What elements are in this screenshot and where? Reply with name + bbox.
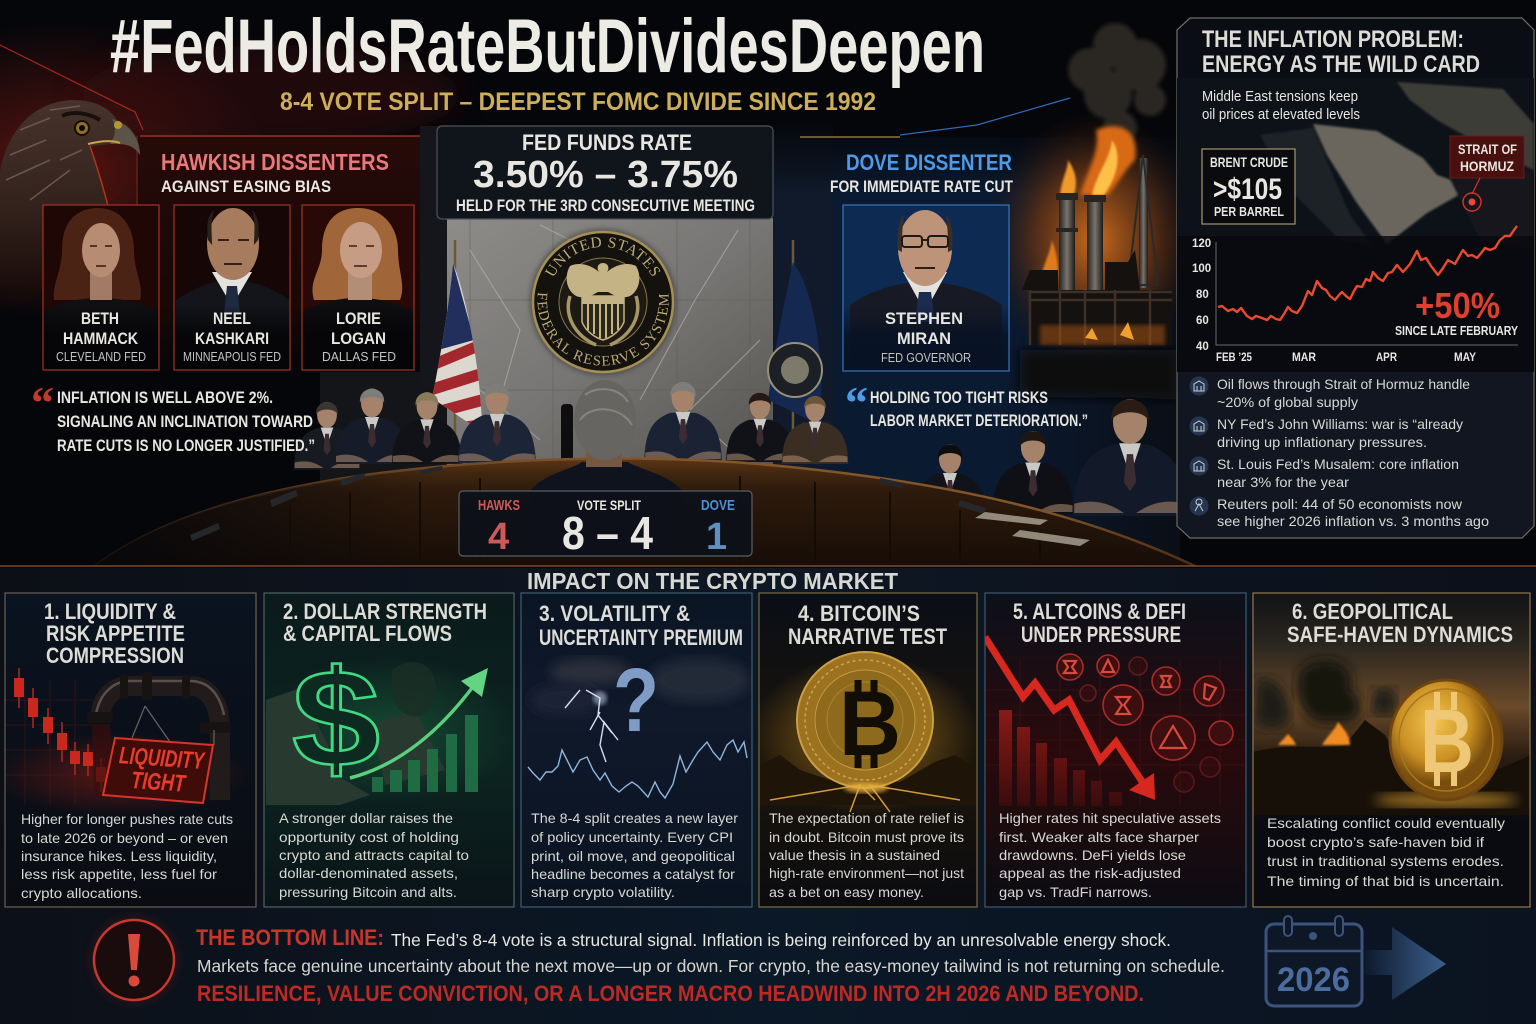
quote: hawkish dissenters: “	[31, 377, 54, 428]
quote: hawkish dissenters: SIGNALING AN INCLINATION TOWARD	[57, 413, 313, 431]
card 1: liquidity: RISK APPETITE	[46, 621, 185, 646]
quote: hawkish dissenters	[31, 377, 315, 455]
illustration: liquidity tight pipe and candles	[6, 668, 237, 812]
portrait card: Lorie Logan: DALLAS FED	[322, 349, 396, 364]
card 1: liquidity: COMPRESSION	[46, 643, 184, 668]
card 1: liquidity: Higher for longer pushes rate cuts	[21, 811, 233, 827]
portrait card: Beth Hammack	[43, 205, 159, 370]
card 5: altcoins and defi: Higher rates hit speculative assets	[999, 810, 1221, 826]
chart: brent crude price: APR	[1376, 352, 1398, 364]
background: right navy side	[775, 137, 1180, 567]
heading: impact on the crypto market: IMPACT ON THE CRYPTO MARKET	[527, 568, 898, 594]
callout: strait of hormuz: HORMUZ	[1460, 159, 1514, 174]
title: #FedHoldsRateButDividesDeepen	[110, 4, 985, 89]
card 4: bitcoin narrative: The expectation of rate relief is	[769, 810, 964, 826]
heading: hawkish dissenters	[161, 149, 389, 196]
quote: hawkish dissenters: INFLATION IS WELL ABOVE 2%.	[57, 389, 273, 407]
illustration: liquidity tight pipe and candles: TIGHT	[130, 767, 188, 798]
illustration: liquidity tight pipe and candles: LIQUIDITY	[118, 742, 206, 775]
callout: brent crude: BRENT CRUDE	[1210, 154, 1288, 170]
list: inflation facts	[1178, 372, 1533, 537]
chair at the centre of the table	[561, 404, 573, 464]
quote: dove dissenter	[845, 377, 1088, 430]
panel: fed funds rate: FED FUNDS RATE	[522, 130, 692, 155]
text: bottom line: Markets face genuine uncertainty about the next move—up or down. For crypto, the easy-money tailwind is not returning on schedule.	[197, 956, 1225, 976]
portrait card: Beth Hammack: HAMMACK	[63, 329, 139, 348]
sub text: Middle East tensions keep	[1202, 89, 1358, 105]
portrait card: Stephen Miran: MIRAN	[897, 329, 951, 348]
quote: dove dissenter: HOLDING TOO TIGHT RISKS	[870, 389, 1048, 407]
portrait card: Stephen Miran: STEPHEN	[885, 309, 963, 328]
illustration: storm, question mark, volatile line: ?	[613, 651, 659, 751]
card 4: bitcoin narrative: in doubt. Bitcoin must prove its	[769, 829, 964, 845]
card 3: volatility: 3. VOLATILITY &	[539, 601, 690, 626]
list: inflation facts: St. Louis Fed’s Musalem: core inflation	[1217, 456, 1459, 472]
quote: hawkish dissenters: RATE CUTS IS NO LONGER JUSTIFIED.”	[57, 437, 315, 455]
text: bottom line: The Fed’s 8-4 vote is a structural signal. Inflation is being reinforced by an unresolvable energy shock.	[391, 930, 1171, 950]
card 6: geopolitical safe haven: boost crypto’s safe-haven bid if	[1267, 834, 1484, 850]
chart: brent crude price: 40	[1196, 341, 1209, 353]
icon: hawk head	[0, 100, 140, 315]
card 1: liquidity	[0, 593, 256, 907]
card 2: dollar strength: A stronger dollar raises the	[279, 810, 453, 826]
portrait card: Neel Kashkari: NEEL	[213, 309, 251, 328]
panel: vote split: DOVE	[701, 497, 735, 514]
chart: brent crude price: FEB ’25	[1216, 352, 1253, 364]
heading: hawkish dissenters: AGAINST EASING BIAS	[161, 177, 331, 196]
card 5: altcoins and defi: drawdowns. DeFi yields lose	[999, 847, 1186, 863]
decorative accent lines	[800, 136, 900, 138]
heading: THE INFLATION PROBLEM:	[1202, 26, 1464, 53]
panel: fed funds rate: HELD FOR THE 3RD CONSECUTIVE MEETING	[456, 196, 755, 215]
card 3: volatility: The 8-4 split creates a new layer	[531, 810, 738, 826]
oil refinery on fire	[987, 23, 1203, 400]
card 3: volatility: UNCERTAINTY PREMIUM	[539, 625, 743, 650]
card 1: liquidity: 1. LIQUIDITY &	[44, 599, 176, 624]
panel: vote split	[459, 491, 752, 559]
list: inflation facts: ~20% of global supply	[1217, 394, 1358, 410]
Federal Reserve seal	[528, 226, 678, 377]
panel: vote split: 4	[488, 516, 509, 558]
portrait card: Neel Kashkari: MINNEAPOLIS FED	[183, 349, 281, 364]
illustration: neon dollar, bills, rising arrow	[266, 662, 492, 805]
illustration: bitcoin coin on cracked ground	[750, 652, 980, 815]
subtitle: 8-4 VOTE SPLIT – DEEPEST FOMC DIVIDE SINCE 1992	[280, 88, 876, 116]
panel: vote split: HAWKS	[478, 497, 520, 514]
card 4: bitcoin narrative: 4. BITCOIN’S	[798, 601, 920, 626]
illustration: neon dollar, bills, rising arrow: $	[292, 642, 380, 796]
flag: United States	[432, 240, 482, 435]
quote: dove dissenter: “	[845, 377, 868, 428]
list: inflation facts: see higher 2026 inflation vs. 3 months ago	[1217, 513, 1489, 529]
illustration: falling arrow, bars, tokens	[985, 637, 1246, 806]
Federal Reserve seal: FEDERAL RESERVE SYSTEM	[537, 292, 669, 366]
card 4: bitcoin narrative: value thesis in a sustained	[769, 847, 940, 863]
chart: brent crude price: 100	[1192, 263, 1211, 275]
callout: brent crude: >$105	[1213, 173, 1282, 206]
list: inflation facts: Oil flows through Strait of Hormuz handle	[1217, 376, 1470, 392]
panel: the inflation problem: oil prices at elevated levels	[1202, 107, 1360, 123]
card 3: volatility	[521, 593, 752, 907]
list: inflation facts: Reuters poll: 44 of 50 economists now	[1217, 496, 1463, 512]
chart: brent crude price: 120	[1192, 238, 1211, 250]
card 6: geopolitical safe haven: The timing of that bid is uncertain.	[1267, 873, 1504, 889]
card 3: volatility: sharp crypto volatility.	[531, 884, 675, 900]
card 4: bitcoin narrative: high-rate environment—not just	[769, 865, 964, 881]
chart: brent crude price	[1192, 226, 1519, 364]
portrait card: Lorie Logan: LORIE	[336, 309, 381, 328]
foreground figure (back of head)	[530, 380, 683, 556]
portrait card: Neel Kashkari	[174, 205, 290, 370]
portrait card: Stephen Miran: FED GOVERNOR	[881, 350, 971, 365]
text: bottom line: THE BOTTOM LINE:	[196, 925, 384, 950]
callout: brent crude	[1202, 149, 1295, 224]
heading: dove dissenter	[830, 150, 1013, 196]
callout: strait of hormuz	[1450, 136, 1524, 211]
illustration: burning landscape and gold bitcoin	[1253, 660, 1530, 815]
card 6: geopolitical safe haven: Escalating conflict could eventually	[1267, 815, 1505, 831]
heading: dove dissenter: DOVE DISSENTER	[846, 150, 1012, 175]
list: inflation facts: driving up inflationary pressures.	[1217, 434, 1427, 450]
card 1: liquidity: less risk appetite, less fuel for	[21, 866, 217, 882]
panel: vote split: VOTE SPLIT	[577, 497, 641, 513]
callout: strait of hormuz: STRAIT OF	[1458, 142, 1517, 157]
card 5: altcoins and defi: gap vs. TradFi narrows.	[999, 884, 1152, 900]
flag: Federal Reserve blue	[768, 240, 822, 440]
card 5: altcoins and defi: first. Weaker alts face sharper	[999, 829, 1199, 845]
card 1: liquidity: to late 2026 or beyond – or even	[21, 830, 228, 846]
card 4: bitcoin narrative: NARRATIVE TEST	[788, 624, 947, 649]
card 6: geopolitical safe haven: 6. GEOPOLITICAL	[1292, 599, 1453, 624]
portrait card: Stephen Miran	[843, 205, 1009, 371]
panel: fed funds rate: 3.50% – 3.75%	[473, 154, 738, 196]
card 2: dollar strength: pressuring Bitcoin and alts.	[279, 884, 457, 900]
illustration: storm, question mark, volatile line	[528, 651, 750, 798]
background: left red hawk side	[0, 20, 460, 381]
panel: the inflation problem	[1177, 18, 1534, 538]
card 4: bitcoin narrative: as a bet on easy money.	[769, 884, 924, 900]
card 3: volatility: print, oil move, and geopolitical	[531, 848, 735, 864]
boardroom table	[95, 459, 1195, 566]
card 2: dollar strength	[260, 593, 520, 907]
panel: fed funds rate	[437, 126, 773, 219]
card 2: dollar strength: crypto and attracts capital to	[279, 847, 469, 863]
card 5: altcoins and defi: 5. ALTCOINS & DEFI	[1013, 599, 1186, 624]
marble wall	[447, 218, 773, 468]
chart: brent crude price: MAR	[1292, 352, 1317, 364]
soft top fade on navy side	[773, 120, 1180, 195]
board members seated	[294, 382, 1187, 520]
card 6: geopolitical safe haven	[1253, 593, 1530, 907]
portrait card: Lorie Logan: LOGAN	[331, 329, 386, 348]
portrait card: Beth Hammack: BETH	[81, 309, 119, 328]
card 2: dollar strength: opportunity cost of holding	[279, 829, 459, 845]
dark pillars beside wall	[420, 126, 833, 466]
card 3: volatility: headline becomes a catalyst for	[531, 866, 735, 882]
chart: brent crude price: 60	[1196, 315, 1209, 327]
band: bottom line background	[0, 908, 1536, 1024]
card 2: dollar strength: 2. DOLLAR STRENGTH	[283, 599, 487, 624]
chart: brent crude price: MAY	[1454, 352, 1476, 364]
Federal Reserve seal: UNITED STATES	[544, 237, 660, 276]
card 1: liquidity: crypto allocations.	[21, 885, 142, 901]
card 3: volatility: of policy uncertainty. Every CPI	[531, 829, 733, 845]
icon: warning exclamation	[92, 918, 176, 1002]
lower background	[0, 568, 1536, 908]
chart: brent crude price: 80	[1196, 289, 1209, 301]
text: bottom line: RESILIENCE, VALUE CONVICTION, OR A LONGER MACRO HEADWIND INTO 2H 2026 AND BEYOND.	[197, 981, 1144, 1006]
portrait card: Neel Kashkari: KASHKARI	[195, 329, 269, 348]
chart: brent crude price: +50%	[1415, 285, 1500, 326]
panel: vote split: 8 – 4	[562, 507, 653, 559]
card 5: altcoins and defi: appeal as the risk-adjusted	[999, 865, 1181, 881]
panel: the inflation problem: ENERGY AS THE WILD CARD	[1202, 51, 1480, 78]
card 2: dollar strength: dollar-denominated assets,	[279, 865, 458, 881]
card 6: geopolitical safe haven: trust in traditional systems erodes.	[1267, 853, 1504, 869]
map: middle east	[1177, 78, 1534, 372]
dark curtain left of wall	[320, 372, 447, 482]
quote: dove dissenter: LABOR MARKET DETERIORATION.”	[870, 412, 1088, 430]
heading: dove dissenter: FOR IMMEDIATE RATE CUT	[830, 177, 1013, 196]
card 5: altcoins and defi	[985, 593, 1246, 907]
panel: vote split: 1	[706, 516, 727, 558]
illustration: bitcoin coin on cracked ground: B	[839, 673, 901, 775]
list: inflation facts: NY Fed’s John Williams: war is “already	[1217, 416, 1463, 432]
card 1: liquidity: insurance hikes. Less liquidity,	[21, 848, 217, 864]
portrait card: Lorie Logan	[302, 205, 414, 370]
illustration: burning landscape and gold bitcoin: B	[1420, 692, 1474, 792]
icon: calendar 2026 with arrow	[1266, 916, 1446, 1006]
section divider	[0, 565, 1536, 567]
heading: hawkish dissenters: HAWKISH DISSENTERS	[161, 149, 389, 175]
text: bottom line	[196, 925, 1225, 1006]
portrait card: Beth Hammack: CLEVELAND FED	[56, 349, 146, 364]
icon: calendar 2026 with arrow: 2026	[1277, 961, 1350, 999]
list: inflation facts: near 3% for the year	[1217, 474, 1349, 490]
callout: brent crude: PER BARREL	[1214, 204, 1284, 219]
card 5: altcoins and defi: UNDER PRESSURE	[1021, 622, 1181, 647]
card 2: dollar strength: & CAPITAL FLOWS	[283, 621, 452, 646]
card 4: bitcoin narrative	[750, 593, 980, 907]
